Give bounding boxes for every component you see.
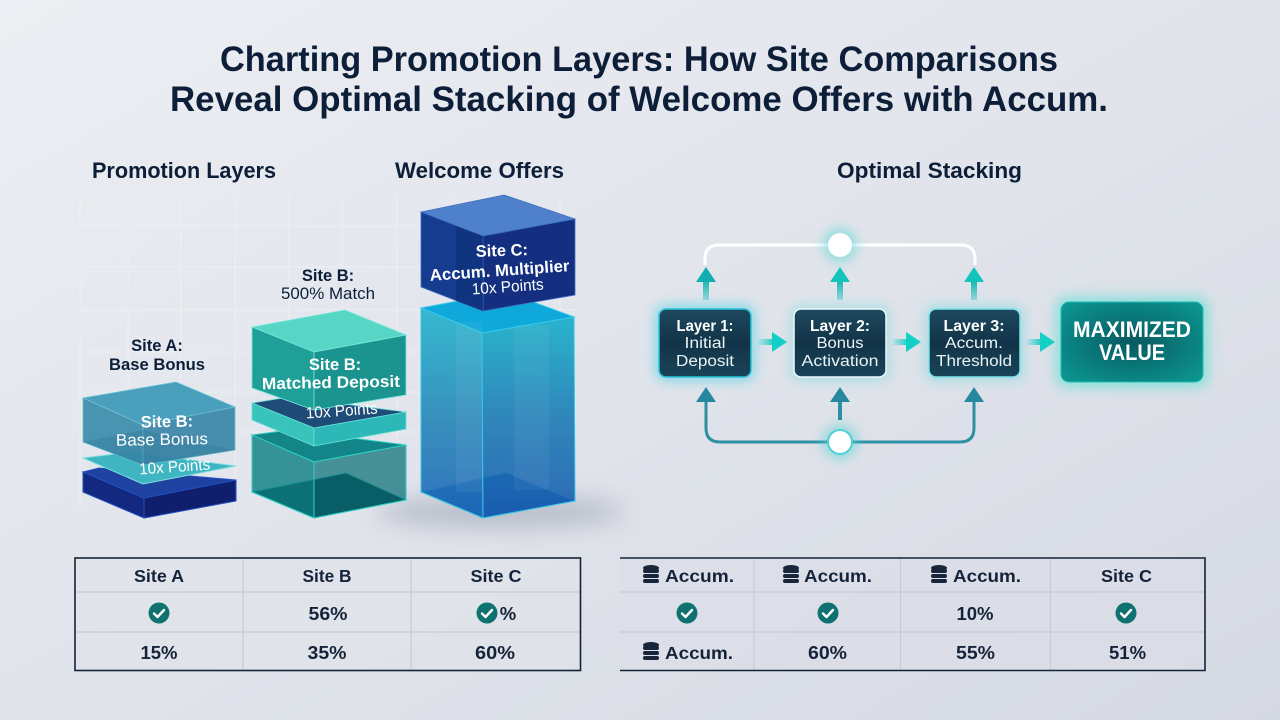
caption: Site B: 500% Match bbox=[281, 285, 375, 303]
row 2: 51% bbox=[1109, 642, 1146, 663]
row 1 bbox=[676, 602, 1136, 624]
layer: Site A top block bbox=[83, 382, 235, 465]
header row: Accum. bbox=[665, 566, 734, 586]
chart shadow bbox=[375, 496, 625, 528]
layer: Site A middle slab bbox=[83, 452, 236, 484]
label: Site B block text: 10x Points bbox=[305, 401, 378, 423]
label: Site A block text bbox=[116, 413, 211, 478]
connector: bottom loop bbox=[706, 402, 974, 459]
label: Site C block text: Site C: bbox=[475, 241, 528, 261]
label: Site B block text: Matched Deposit bbox=[262, 373, 401, 393]
layer: Site C top block bbox=[421, 195, 575, 311]
header row bbox=[134, 566, 522, 586]
arrows: up from bottom loop bbox=[696, 387, 984, 420]
flow diagram: optimal stacking bbox=[655, 228, 1209, 459]
step: Layer 1 bbox=[659, 309, 751, 377]
step: Layer 2 bbox=[794, 309, 886, 377]
step: Layer 1: Layer 1: bbox=[676, 318, 734, 335]
header row bbox=[643, 565, 1152, 586]
heading: Optimal Stacking: Optimal Stacking bbox=[837, 158, 1022, 183]
row 2 bbox=[643, 642, 1146, 663]
caption: Site A: Site A: bbox=[131, 337, 183, 355]
header row: Site A bbox=[134, 566, 184, 586]
label: Site B block text bbox=[262, 356, 401, 423]
connector: top loop bbox=[705, 228, 975, 265]
layer: Site B bottom block bbox=[252, 430, 406, 518]
arrows: between steps bbox=[758, 332, 1055, 352]
row 2: 55% bbox=[956, 642, 995, 663]
label: Site C block text bbox=[429, 241, 571, 299]
label: Site A block text: 10x Points bbox=[139, 457, 211, 478]
result: Maximized Value: VALUE bbox=[1099, 340, 1165, 365]
step: Layer 3 bbox=[929, 309, 1020, 377]
caption: Site A: Base Bonus bbox=[109, 356, 205, 374]
row 1 bbox=[148, 602, 516, 624]
title bbox=[170, 40, 1108, 119]
row 2: 60% bbox=[808, 642, 847, 663]
heading: Welcome Offers: Welcome Offers bbox=[395, 158, 564, 183]
step: Layer 3: Accum. bbox=[945, 335, 1003, 352]
title: Reveal Optimal Stacking of Welcome Offers with Accum. bbox=[170, 80, 1108, 119]
header row: Site C bbox=[470, 566, 522, 586]
row 2: Accum. bbox=[665, 643, 733, 663]
caption: Site B: Site B: bbox=[302, 267, 354, 285]
label: Site A block text: Site B: bbox=[141, 413, 193, 431]
row 2: 35% bbox=[308, 642, 346, 663]
header row: Accum. bbox=[804, 566, 872, 586]
step: Layer 3: Layer 3: bbox=[944, 318, 1004, 335]
row 2: 15% bbox=[140, 642, 178, 663]
3D stack: Site B bbox=[252, 310, 406, 518]
layer: Site B middle slab bbox=[252, 397, 406, 446]
row 2: 60% bbox=[475, 642, 515, 663]
step: Layer 2: Bonus bbox=[816, 335, 864, 352]
row 1: % bbox=[500, 603, 516, 624]
row 1: 10% bbox=[956, 603, 994, 624]
step: Layer 2: Layer 2: bbox=[810, 318, 870, 335]
layer: Site A bottom block bbox=[83, 468, 236, 518]
table: accumulator comparison bbox=[620, 558, 1205, 671]
header row: Accum. bbox=[953, 566, 1021, 586]
arrows: up into top loop bbox=[696, 267, 984, 300]
caption: Site B bbox=[281, 267, 375, 303]
layer: Site B top block bbox=[252, 310, 406, 410]
table: site comparison bbox=[75, 558, 580, 671]
label: Site A block text: Base Bonus bbox=[116, 430, 208, 450]
step: Layer 3: Threshold bbox=[936, 353, 1012, 370]
step: Layer 2: Activation bbox=[802, 353, 878, 370]
label: Site C block text: 10x Points bbox=[471, 277, 544, 299]
box glows bbox=[655, 296, 1209, 388]
step: Layer 1: Deposit bbox=[676, 353, 735, 370]
row 2 bbox=[140, 642, 515, 663]
title: Charting Promotion Layers: How Site Comparisons bbox=[220, 40, 1058, 79]
header row: Site C bbox=[1101, 566, 1152, 586]
3D stack: Site A bbox=[83, 382, 236, 518]
heading: Promotion Layers: Promotion Layers bbox=[92, 158, 276, 183]
step: Layer 1: Initial bbox=[684, 335, 726, 352]
3D stack: Site C bbox=[421, 195, 575, 518]
label: Site C block text: Accum. Multiplier bbox=[429, 257, 571, 285]
result: Maximized Value: MAXIMIZED bbox=[1073, 317, 1191, 342]
result: Maximized Value bbox=[1061, 302, 1203, 382]
caption: Site A bbox=[109, 337, 205, 374]
row 1: 56% bbox=[308, 603, 348, 624]
header row: Site B bbox=[302, 566, 352, 586]
label: Site B block text: Site B: bbox=[309, 356, 361, 374]
layer: Site C tall column bbox=[421, 292, 575, 518]
